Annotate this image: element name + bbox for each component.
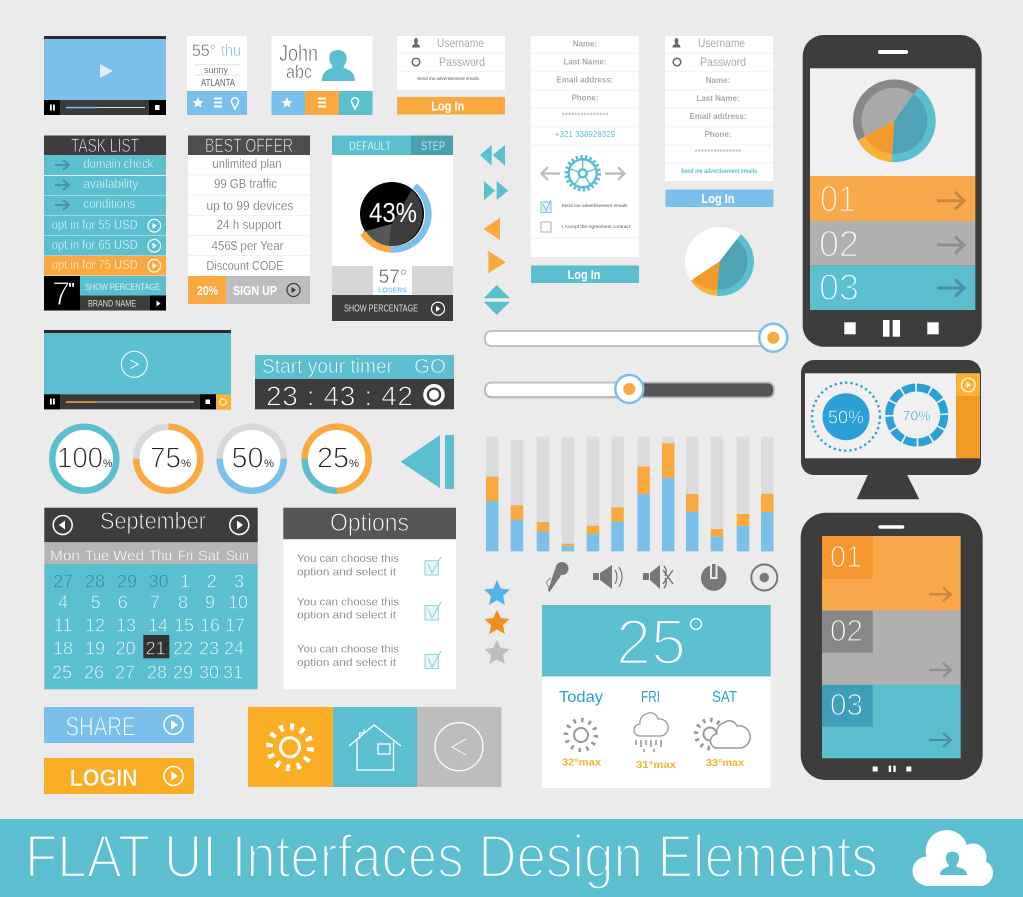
tile: back (417, 707, 502, 787)
calendar days: 5 (91, 592, 101, 612)
registration form with gear: *************** (562, 112, 608, 120)
signup form: blue: Email address: (690, 112, 746, 121)
task list panel: availability (83, 177, 139, 191)
tablet mockup: 03 (830, 687, 863, 722)
progress donut: 100%: % (103, 458, 113, 470)
progress donut: 100% (52, 427, 116, 491)
icon: gear (566, 157, 599, 190)
percentage pie panel: SHOW PERCENTAGE (344, 304, 418, 314)
task list panel: opt in for 75 USD (52, 258, 138, 272)
progress donut: 50% (220, 427, 284, 491)
profile card: John: John (279, 40, 318, 66)
registration form with gear: +321 338928329 (555, 130, 616, 139)
task list panel: domain check (83, 157, 154, 171)
smartphone mockup: 03 (819, 267, 859, 308)
weather mini card: thu (221, 41, 241, 60)
icon: power (701, 563, 726, 591)
calendar days: 30 (199, 662, 219, 682)
countdown timer: Start your timer (262, 356, 393, 378)
best offer panel: unlimited plan (212, 156, 282, 171)
progress donut: 25% (305, 427, 369, 491)
task list panel (44, 136, 166, 312)
calendar days: 2 (207, 571, 217, 591)
progress donut: 100%: 100 (57, 442, 103, 474)
calendar days: 25 (52, 662, 72, 682)
calendar days: 10 (228, 592, 248, 612)
signup form: blue: Username (698, 38, 745, 50)
calendar days: 27 (115, 662, 135, 682)
registration form with gear: Phone: (571, 94, 599, 103)
weather forecast panel (542, 605, 771, 788)
best offer panel: 24 h support (216, 217, 282, 232)
percentage pie panel: 57° (379, 267, 407, 288)
progress donut: 75% (136, 427, 200, 491)
icon: cloud with user (912, 830, 993, 886)
signup form: blue: Log In (702, 192, 734, 206)
task list panel: opt in for 55 USD (52, 218, 138, 232)
icon: rain cloud (634, 713, 668, 752)
progress donut: 75%: % (181, 458, 191, 470)
sliders (485, 324, 787, 403)
registration form with gear: Send me advertisement emails (562, 203, 628, 209)
calendar days: 18 (53, 638, 73, 658)
calendar days: 16 (200, 616, 220, 636)
weather forecast panel: FRI (641, 689, 660, 706)
calendar days: 29 (173, 662, 193, 682)
best offer panel: 99 GB traffic (214, 176, 277, 191)
task list panel: BRAND NAME (88, 298, 136, 310)
icon: record target (751, 564, 777, 590)
options panel: Options (330, 509, 409, 537)
options panel: option and select it (297, 657, 396, 669)
best offer panel: BEST OFFER (205, 136, 293, 157)
video player: blue (44, 36, 166, 115)
calendar days: 22 (173, 638, 193, 658)
calendar days: 3 (234, 571, 244, 591)
share button: SHARE (66, 712, 136, 742)
calendar days: 4 (58, 592, 68, 612)
best offer panel: 20% (197, 284, 218, 298)
login form: orange: Password (439, 57, 485, 69)
registration form with gear: I Accept the Agreement contract (562, 224, 631, 230)
progress donut: 50%: 50 (232, 442, 264, 474)
progress donut: 50%: % (264, 458, 274, 470)
calendar days: 26 (84, 662, 104, 682)
calendar days: 1 (180, 571, 190, 591)
percentage pie panel: 43% (369, 197, 417, 228)
signup form: blue: Name: (706, 76, 730, 85)
percentage pie panel: DEFAULT (349, 139, 392, 153)
task list panel: opt in for 65 USD (52, 238, 138, 252)
weather mini card (187, 36, 247, 115)
options panel: You can choose this (297, 644, 400, 656)
task list panel: TASK LIST (71, 136, 139, 157)
calendar days: 20 (116, 638, 136, 658)
weekday header (50, 548, 249, 565)
options panel: You can choose this (297, 553, 400, 565)
calendar days: 29 (117, 571, 137, 591)
calendar days: 30 (149, 571, 169, 591)
countdown timer: 23 : 43 : 42 (266, 380, 413, 412)
tablet mockup: 01 (830, 539, 862, 574)
calendar days: 6 (118, 592, 128, 612)
weekday header: Thu (149, 548, 172, 565)
registration form with gear: Last Name: (563, 58, 607, 66)
icon: speaker muted (643, 565, 673, 589)
calendar days: 11 (54, 616, 72, 636)
desktop monitor mockup: 70% (903, 408, 931, 424)
login form: orange (397, 36, 505, 114)
signup form: blue: Send me advertisement emails (681, 169, 758, 175)
progress donut: 25%: 25 (317, 442, 349, 474)
weekday header: Tue (85, 548, 109, 565)
calendar days: 12 (85, 616, 105, 636)
icon: microphone (547, 562, 568, 592)
login button: LOGIN (70, 765, 138, 792)
signup form: blue (665, 36, 774, 207)
login form: orange: Username (437, 38, 484, 50)
login form: orange: Send me advertisement emails (417, 76, 480, 81)
weekday header: Wed (113, 548, 144, 565)
calendar: September (44, 508, 258, 689)
signup form: blue: Last Name: (696, 94, 740, 103)
rating stars (484, 580, 510, 664)
icon: partly cloudy (696, 720, 750, 748)
calendar days (52, 571, 248, 682)
tablet mockup: 02 (830, 613, 863, 648)
progress donut: 25%: % (349, 458, 359, 470)
best offer panel: SIGN UP (233, 284, 277, 298)
weekday header: Mon (50, 548, 80, 565)
registration form with gear: Email address: (557, 76, 613, 85)
login form: orange: Log In (431, 100, 464, 114)
options panel: option and select it (297, 610, 396, 622)
smartphone mockup: 01 (820, 179, 856, 220)
options panel: You can choose this (297, 596, 400, 608)
calendar days: 15 (174, 616, 194, 636)
percentage pie panel: LOSERS (378, 288, 407, 294)
tile: sun (248, 707, 333, 787)
percentage pie panel (332, 136, 453, 321)
countdown timer (255, 355, 454, 412)
weather mini card: ATLANTA (201, 78, 235, 89)
signup form: blue: Phone: (704, 130, 732, 139)
weekday header: Fri (178, 548, 193, 565)
task list panel: conditions (83, 197, 135, 211)
bar chart: equalizer (486, 437, 774, 551)
calendar days: 28 (147, 662, 167, 682)
calendar days: 8 (178, 592, 188, 612)
weather forecast panel: 33°max (706, 757, 744, 769)
profile card: John (272, 36, 372, 115)
task list panel: SHOW PERCENTAGE (85, 282, 160, 293)
options panel (283, 508, 456, 689)
icon: speaker on (593, 565, 622, 589)
video player: teal (44, 330, 231, 409)
signup form: blue: *************** (695, 148, 741, 157)
weather mini card: 55° (192, 41, 216, 60)
weather mini card: sunny (204, 65, 229, 75)
icon: back to start arrow (401, 435, 454, 489)
desktop monitor mockup: 50% (828, 408, 864, 428)
registration form with gear (531, 36, 639, 283)
weekday header: Sat (198, 548, 221, 565)
tile: home (333, 707, 417, 787)
calendar days: 14 (148, 616, 168, 636)
weather forecast panel: 31°max (636, 759, 676, 771)
weather forecast panel: 25 (616, 606, 686, 678)
icon: sun small (566, 720, 596, 750)
calendar days: 27 (53, 571, 73, 591)
task list panel: " (68, 280, 75, 297)
countdown timer: GO (414, 356, 446, 378)
options panel: option and select it (297, 566, 396, 578)
best offer panel (188, 136, 310, 304)
task list panel: 7 (52, 275, 70, 312)
weekday header: Sun (226, 548, 249, 565)
calendar days: 24 (224, 638, 244, 658)
calendar days: 23 (199, 638, 219, 658)
best offer panel: Discount CODE (206, 258, 284, 273)
arrow controls (480, 145, 510, 315)
best offer panel: up to 99 devices (206, 198, 294, 213)
smartphone mockup: 02 (819, 224, 859, 265)
profile card: John: abc (286, 62, 312, 82)
smartphone mockup (803, 35, 982, 347)
weather forecast panel: 32°max (562, 756, 601, 768)
phone pie chart (853, 79, 936, 162)
calendar days: 28 (85, 571, 105, 591)
calendar days: 17 (225, 616, 245, 636)
progress donut: 75%: 75 (150, 442, 181, 474)
pie chart: white (685, 227, 754, 296)
signup form: blue: Password (700, 57, 746, 69)
calendar days: 21 (146, 638, 166, 658)
calendar days: 19 (85, 638, 105, 658)
calendar days: 31 (223, 662, 243, 682)
desktop monitor mockup (801, 360, 981, 499)
calendar: September: September (100, 508, 206, 535)
registration form with gear: Log In (568, 268, 600, 282)
weather forecast panel: Today (559, 689, 603, 706)
calendar days: 9 (205, 592, 215, 612)
best offer panel: 456$ per Year (212, 238, 284, 253)
calendar days: 7 (150, 592, 160, 612)
login button (44, 758, 194, 794)
share button (44, 707, 194, 743)
tablet mockup (801, 513, 983, 780)
percentage pie panel: STEP (421, 139, 445, 153)
title banner: FLAT UI Interfaces Design Elements (25, 823, 878, 890)
calendar days: 13 (116, 616, 136, 636)
registration form with gear: Name: (573, 40, 597, 49)
weather forecast panel: SAT (712, 689, 737, 706)
